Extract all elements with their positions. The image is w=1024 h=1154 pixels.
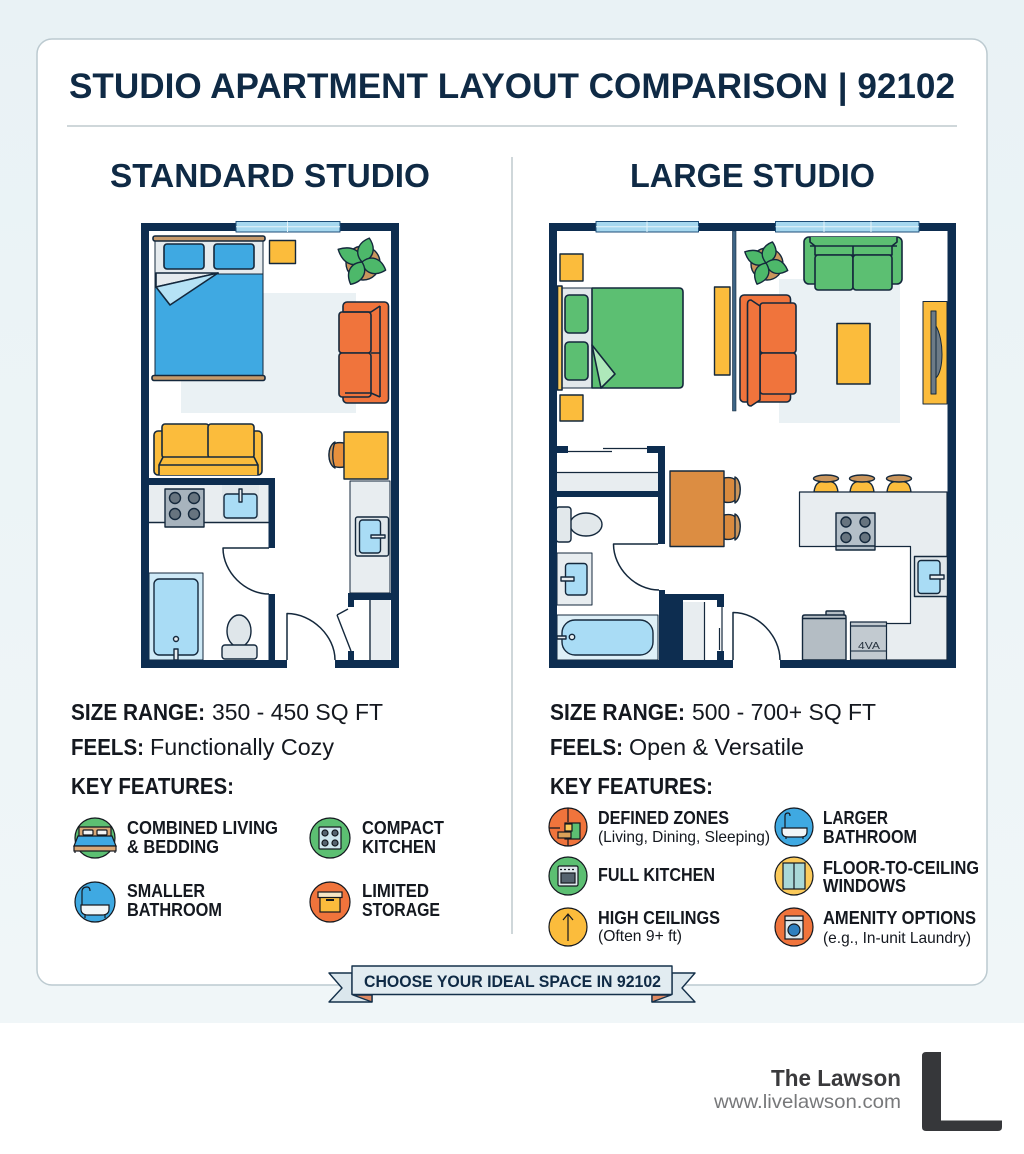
icon: window — [775, 857, 813, 895]
standard studio stats: KEY FEATURES: — [71, 773, 234, 799]
icon: bed — [74, 818, 116, 858]
nightstand — [270, 240, 296, 264]
icon: up arrow — [549, 908, 587, 946]
heading: large studio: LARGE STUDIO — [630, 157, 875, 194]
logo: L mark — [922, 1052, 1002, 1131]
label: BATHROOM — [127, 900, 222, 920]
ribbon banner: CHOOSE YOUR IDEAL SPACE IN 92102 — [364, 972, 661, 991]
green sofa — [804, 237, 902, 290]
label — [127, 881, 222, 920]
bar stools — [814, 475, 912, 492]
plant — [742, 240, 790, 287]
label: FULL KITCHEN — [598, 865, 715, 885]
label — [362, 818, 444, 857]
label: AMENITY OPTIONS — [823, 908, 976, 928]
kitchen sink — [914, 556, 948, 596]
bathtub — [149, 573, 203, 660]
icon: storage box — [310, 882, 350, 922]
toilet — [222, 615, 257, 659]
oven — [850, 622, 886, 660]
orange sofa — [339, 302, 388, 403]
website: www.livelawson.com — [713, 1091, 901, 1113]
standard studio stats: SIZE RANGE: — [71, 699, 205, 725]
large studio stats — [550, 699, 876, 799]
closet shelf — [557, 448, 658, 491]
standard studio stats — [71, 699, 383, 799]
standard features — [74, 818, 444, 922]
dining table — [670, 471, 740, 546]
label — [362, 881, 440, 920]
yellow sofa — [154, 424, 262, 475]
icon: oven — [549, 857, 587, 895]
plant — [335, 236, 388, 288]
large studio stats: SIZE RANGE: — [550, 699, 685, 725]
label: COMBINED LIVING — [127, 818, 278, 838]
bed — [152, 236, 265, 380]
icon: defined zones — [549, 808, 587, 846]
rug — [181, 293, 356, 413]
window — [236, 222, 340, 232]
coffee table — [837, 324, 870, 384]
heading: standard studio: STANDARD STUDIO — [110, 157, 430, 194]
label — [823, 858, 979, 896]
right kitchen counter — [350, 481, 390, 593]
large studio stats: Open & Versatile — [629, 734, 804, 760]
window: left — [596, 222, 698, 232]
stove — [836, 513, 875, 550]
label: BATHROOM — [823, 827, 917, 847]
label: STORAGE — [362, 900, 440, 920]
label: COMPACT — [362, 818, 444, 838]
floor plan: standard studio — [141, 222, 399, 668]
label — [823, 808, 917, 847]
closet — [337, 600, 390, 660]
main card — [37, 39, 987, 985]
doors — [614, 544, 780, 660]
standard studio stats: FEELS: — [71, 734, 144, 760]
closet — [683, 602, 722, 660]
label: (e.g., In-unit Laundry) — [823, 930, 971, 947]
label: SMALLER — [127, 881, 205, 901]
label: KITCHEN — [362, 837, 436, 857]
label: FLOOR-TO-CEILING — [823, 858, 979, 878]
label: (Living, Dining, Sleeping) — [598, 829, 770, 846]
icon: cooktop — [310, 818, 350, 858]
label: HIGH CEILINGS — [598, 908, 720, 928]
standard studio stats: 350 - 450 SQ FT — [212, 699, 383, 725]
label: & BEDDING — [127, 837, 219, 857]
rug — [779, 279, 900, 423]
label: WINDOWS — [823, 876, 906, 896]
TV console — [923, 302, 947, 404]
title: STUDIO APARTMENT LAYOUT COMPARISON | 92102 — [69, 67, 955, 106]
L-shaped kitchen island and counter — [800, 492, 947, 660]
window: right — [776, 222, 919, 232]
bathroom sink — [557, 553, 592, 605]
walls — [549, 223, 956, 668]
large studio stats: 500 - 700+ SQ FT — [692, 699, 876, 725]
dining table and chair — [329, 432, 388, 479]
refrigerator — [802, 611, 846, 660]
bed — [558, 286, 683, 390]
icon: bathtub — [75, 882, 115, 922]
label — [598, 908, 720, 945]
toilet — [556, 507, 602, 542]
kitchenette counter — [149, 485, 269, 527]
oven: 4VA — [858, 641, 880, 652]
brand name: The Lawson — [771, 1065, 901, 1091]
orange sofa — [740, 295, 796, 406]
label: LIMITED — [362, 881, 429, 901]
icon: large bathtub — [775, 808, 813, 846]
doors — [223, 548, 335, 660]
icon: washing machine — [775, 908, 813, 946]
large features — [549, 808, 979, 947]
floor plan: large studio — [549, 222, 956, 668]
label — [823, 908, 976, 947]
large studio stats: KEY FEATURES: — [550, 773, 713, 799]
walls — [141, 223, 399, 668]
standard studio stats: Functionally Cozy — [150, 734, 334, 760]
nightstands and console — [560, 254, 730, 421]
label — [598, 808, 770, 846]
label: LARGER — [823, 808, 888, 828]
divider partition — [732, 231, 736, 411]
label — [127, 818, 278, 857]
large studio stats: FEELS: — [550, 734, 623, 760]
bathtub — [557, 615, 658, 660]
label: (Often 9+ ft) — [598, 928, 682, 945]
label: DEFINED ZONES — [598, 808, 729, 828]
ribbon banner — [329, 966, 695, 1002]
